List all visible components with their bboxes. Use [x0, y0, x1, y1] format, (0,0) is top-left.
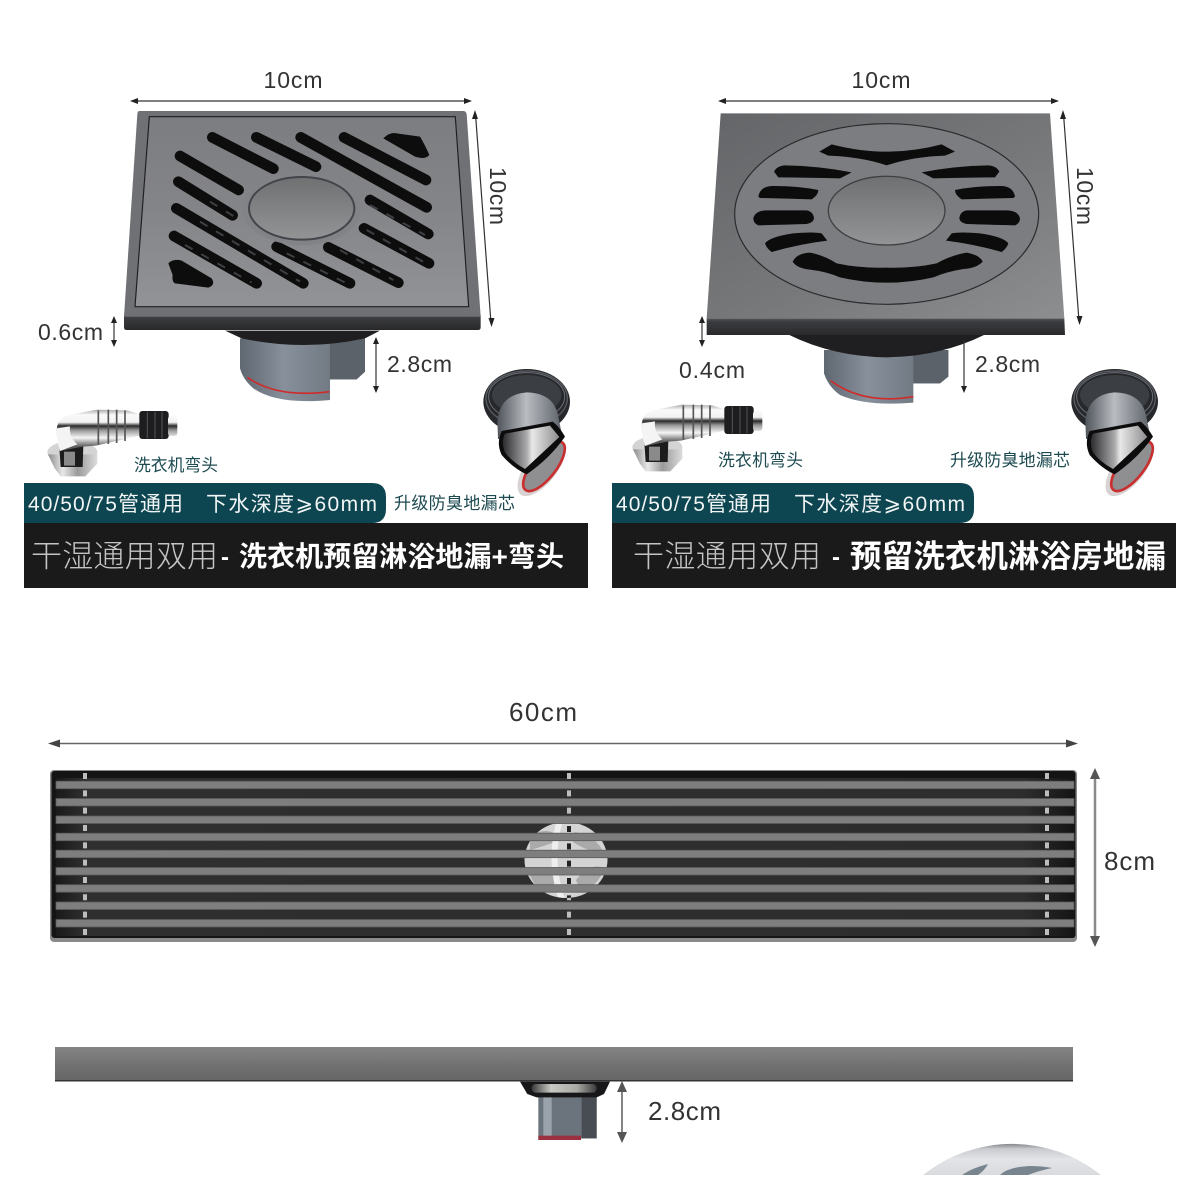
- pipe under drain one: [225, 331, 380, 401]
- dimension: drain two width: [718, 67, 1059, 104]
- title bar: drain two: 干湿通用双用: [633, 539, 821, 574]
- dimension: side pipe 2.8cm: 2.8cm: [648, 1096, 721, 1126]
- linear drain: top view grate: [50, 770, 1077, 942]
- icon: odor trap core two: [1071, 369, 1163, 504]
- teal specification pill two: [612, 483, 974, 523]
- title bar: drain two: 预留洗衣机淋浴房地漏: [850, 538, 1166, 574]
- rivet columns: [85, 773, 1047, 936]
- centre boss: [828, 176, 945, 245]
- side outlet pipe: [520, 1082, 610, 1140]
- icon: odor trap core: [483, 369, 575, 504]
- pipe under drain two: [789, 335, 984, 404]
- teal specification pill: [24, 483, 386, 523]
- dimension: plate thickness 0.4cm: [679, 316, 745, 383]
- plate side edge: [707, 318, 1065, 335]
- slots: [753, 144, 1020, 283]
- dimension: linear drain width: [1090, 768, 1155, 947]
- dimension: plate thickness 0.6cm: 0.6cm: [38, 319, 103, 345]
- inner slot details: [185, 202, 425, 285]
- channel: [56, 778, 1074, 936]
- teal specification pill two: 40/50/75管通用: [616, 493, 771, 516]
- dimension: drain one width: [130, 67, 472, 104]
- partial round strainer: [923, 1144, 1101, 1175]
- plate top: [707, 113, 1064, 318]
- dimension: drain two width: 10cm: [852, 67, 910, 93]
- caption: elbow two: 洗衣机弯头: [718, 451, 803, 470]
- dimension: linear drain width: 8cm: [1104, 846, 1155, 876]
- outer frame: [50, 770, 1077, 942]
- plate top frame: [124, 111, 481, 317]
- title bar: drain one: [24, 523, 588, 588]
- title bar: drain two: [612, 523, 1176, 588]
- dimension: drain two depth: [1060, 110, 1098, 325]
- dimension: pipe 2.8cm: 2.8cm: [387, 351, 452, 377]
- side plate: [55, 1047, 1073, 1081]
- drain two: round grate: [707, 113, 1065, 404]
- dimension: drain one depth: [472, 110, 511, 327]
- corner openings: [168, 133, 429, 288]
- dimension: drain one width: 10cm: [264, 67, 322, 93]
- dimension: plate thickness 0.4cm: 0.4cm: [679, 357, 745, 383]
- inner plate: [135, 117, 469, 307]
- title bar: drain two: -: [832, 544, 840, 571]
- icon: washing machine elbow: [47, 410, 177, 476]
- icon: washing machine elbow two: [632, 405, 762, 471]
- caption: odor trap: 升级防臭地漏芯: [394, 494, 515, 513]
- plate side edge: [124, 315, 481, 330]
- dimension: pipe 2.8cm two: 2.8cm: [975, 351, 1040, 377]
- dimension: linear drain length: 60cm: [509, 697, 577, 727]
- centre outlet: [524, 824, 608, 898]
- centre boss: [242, 172, 361, 245]
- title bar: drain one: 洗衣机预留淋浴地漏+弯头: [239, 541, 564, 572]
- caption: elbow: 洗衣机弯头: [134, 456, 218, 475]
- dimension: pipe 2.8cm two: [961, 340, 1040, 393]
- dimension: plate thickness 0.6cm: [38, 316, 117, 347]
- circular cover: [735, 124, 1039, 304]
- teal specification pill: 下水深度⩾60mm: [206, 493, 377, 516]
- teal specification pill two: 下水深度⩾60mm: [794, 493, 965, 516]
- dimension: side pipe 2.8cm: [617, 1081, 721, 1143]
- dimension: linear drain length: [48, 697, 1078, 748]
- teal specification pill: 40/50/75管通用: [28, 493, 183, 516]
- dimension: pipe 2.8cm: [373, 337, 452, 393]
- dimension: drain one depth: 10cm: [485, 167, 511, 225]
- slats: [56, 781, 1074, 927]
- dimension: drain two depth: 10cm: [1072, 167, 1098, 225]
- title bar: drain one: 干湿通用双用: [31, 539, 218, 574]
- linear drain: side view: [55, 1047, 1073, 1140]
- caption: odor trap two: 升级防臭地漏芯: [950, 451, 1070, 470]
- drain one: square grate: [124, 111, 481, 401]
- title bar: drain one: -: [221, 544, 229, 571]
- slots: [174, 137, 429, 283]
